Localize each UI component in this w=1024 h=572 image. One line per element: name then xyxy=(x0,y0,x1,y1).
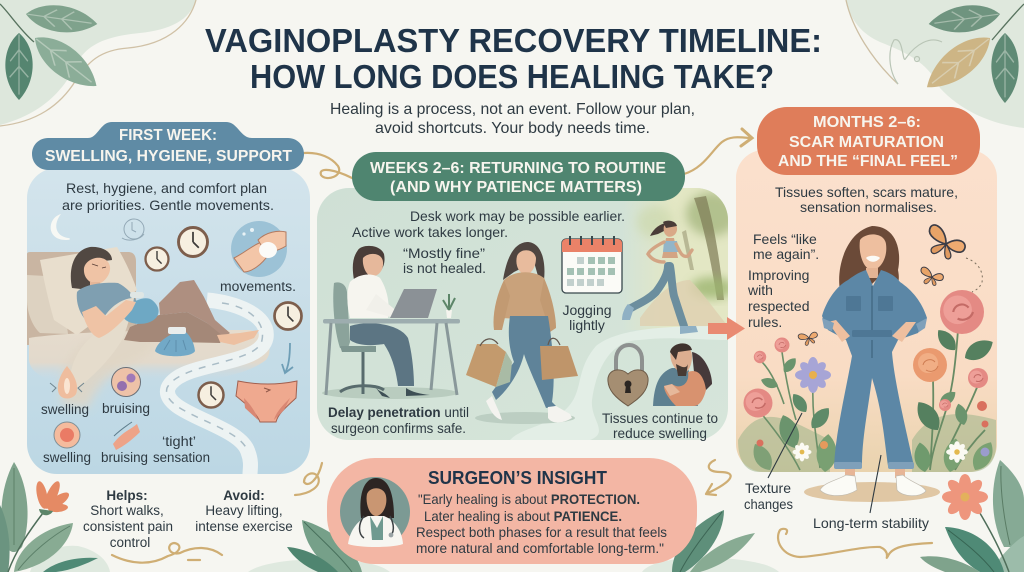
labels: swelling and bruising row one xyxy=(41,401,150,417)
illustration: forest backdrop xyxy=(632,188,728,330)
callout: improving: with xyxy=(747,282,773,298)
illustration: woman at desk xyxy=(322,246,460,399)
decoration: bottom-centre-right foliage xyxy=(642,510,779,572)
callout: feels like me again: me again”. xyxy=(753,246,819,262)
intro text: months 2-6: Tissues soften, scars mature, xyxy=(775,184,958,200)
heading: months 2-6: AND THE “FINAL FEEL” xyxy=(778,153,958,170)
illustration: couple xyxy=(653,343,712,406)
quote: surgeon's insight: Later healing is about PATIENCE. xyxy=(424,508,622,524)
labels: swelling, bruising and tight sensation: sensation xyxy=(153,450,210,465)
heading: weeks 2-6 xyxy=(352,152,685,201)
intro text: first week: Rest, hygiene, and comfort plan xyxy=(66,180,267,196)
panel background: surgeon's insight xyxy=(327,458,697,564)
icon: heart padlock xyxy=(608,345,648,406)
callout: improving: respected xyxy=(748,298,809,314)
decoration: bottom-right foliage xyxy=(920,460,1024,572)
decoration: bottom-centre-left foliage xyxy=(248,520,390,572)
label: texture changes xyxy=(744,480,793,512)
caption: delay penetration: surgeon confirms safe. xyxy=(331,420,466,436)
heading: first week xyxy=(32,122,304,170)
leader: long-term stability xyxy=(870,455,881,513)
icon: ice pack xyxy=(155,327,195,356)
icon: inflamed skin xyxy=(54,422,80,448)
icon: crescent moon xyxy=(51,214,70,240)
quote: surgeon's insight: more natural and comfortable long-term." xyxy=(416,540,664,556)
caption: delay penetration xyxy=(328,404,469,436)
panel background: first week xyxy=(27,168,310,474)
intro text: weeks 2-6 xyxy=(352,208,625,240)
illustration: meadow left xyxy=(738,338,838,474)
caption: tissues xyxy=(602,410,718,441)
heading: weeks 2-6: (AND WHY PATIENCE MATTERS) xyxy=(390,179,642,196)
icon: swelling xyxy=(50,366,84,398)
title xyxy=(205,22,822,95)
callout: feels like me again: Feels “like xyxy=(753,231,817,247)
illustration: walking woman with bags xyxy=(466,242,578,424)
intro text: first week xyxy=(62,180,274,213)
intro text: weeks 2-6: Active work takes longer. xyxy=(352,224,508,240)
title: VAGINOPLASTY RECOVERY TIMELINE: xyxy=(205,22,822,59)
illustration: jogger xyxy=(622,221,698,334)
text block: avoid xyxy=(195,488,293,534)
leader: texture changes xyxy=(768,413,802,478)
label: jogging lightly: lightly xyxy=(569,317,605,333)
icon: bruising xyxy=(112,368,140,396)
intro text: months 2-6: sensation normalises. xyxy=(800,199,937,215)
callout: improving: Improving xyxy=(748,267,809,283)
label: jogging lightly: Jogging xyxy=(562,302,612,318)
subtitle xyxy=(330,101,695,137)
panel: weeks 2-6 xyxy=(317,152,738,441)
text block: avoid: Avoid: xyxy=(223,488,265,503)
heading: surgeon's insight: SURGEON’S INSIGHT xyxy=(428,467,608,488)
intro text: first week: are priorities. Gentle movements. xyxy=(62,197,274,213)
caption: tissues: reduce swelling xyxy=(613,425,707,441)
connector squiggles and arrows xyxy=(112,129,932,563)
icons: butterflies xyxy=(798,223,982,347)
callout: feels like me again xyxy=(753,231,819,262)
illustration: resting woman xyxy=(70,247,259,392)
icon: arrow down xyxy=(282,343,293,373)
panel background: months 2-6 xyxy=(736,150,997,472)
label: jogging lightly xyxy=(562,302,612,333)
heading: months 2-6: MONTHS 2–6: xyxy=(813,114,921,131)
labels: swelling, bruising and tight sensation: ‘tight’ xyxy=(162,434,196,449)
quote: surgeon's insight xyxy=(416,491,667,556)
text block: helps: Short walks, xyxy=(90,503,164,518)
icon: hand washing xyxy=(231,221,287,277)
icon: clocks xyxy=(146,228,302,408)
text block: helps: Helps: xyxy=(106,488,148,503)
panel: surgeon's insight xyxy=(327,458,697,564)
label: long-term stability: Long-term stability xyxy=(813,515,929,531)
text block: helps: control xyxy=(110,535,150,550)
labels: swelling, bruising and tight sensation: swelling xyxy=(43,450,91,465)
text block: helps: consistent pain xyxy=(83,519,173,534)
caption: tissues: Tissues continue to xyxy=(602,410,718,426)
icon: sketched clock xyxy=(122,219,144,240)
intro text: weeks 2-6: Desk work may be possible earlier. xyxy=(410,208,625,224)
decoration: top-right foliage xyxy=(846,0,1024,128)
caption: delay penetration: Delay penetration until xyxy=(328,404,469,420)
illustration: smiling woman in denim jumpsuit xyxy=(804,226,940,502)
label: texture changes: changes xyxy=(744,496,793,512)
label: texture changes: Texture xyxy=(745,480,791,496)
icon: calendar xyxy=(562,236,622,293)
panel: months 2-6 xyxy=(736,107,998,513)
callout: mostly fine: is not healed. xyxy=(403,260,486,276)
callout: improving: rules. xyxy=(748,314,782,330)
subtitle: avoid shortcuts. Your body needs time. xyxy=(375,120,650,137)
labels: swelling, bruising and tight sensation xyxy=(43,434,210,465)
panel: first week xyxy=(27,122,310,474)
heading: months 2-6: SCAR MATURATION xyxy=(789,134,944,151)
intro text: months 2-6 xyxy=(775,184,958,215)
text block: helps xyxy=(83,488,173,550)
arrow: to months 2-6 xyxy=(708,317,745,340)
callout: improving xyxy=(747,267,809,330)
title: HOW LONG DOES HEALING TAKE? xyxy=(250,58,774,95)
quote: surgeon's insight: Respect both phases for a result that feels xyxy=(416,524,667,540)
illustration: bed xyxy=(27,247,269,408)
label: movements: movements. xyxy=(220,279,296,294)
callout: mostly fine xyxy=(403,245,486,276)
icon: underwear xyxy=(236,381,297,422)
callout: mostly fine: “Mostly fine” xyxy=(403,245,485,261)
subtitle: Healing is a process, not an event. Follow your plan, xyxy=(330,101,695,118)
illustration: light winding path xyxy=(510,326,728,440)
heading: months 2-6 xyxy=(757,107,980,175)
heading: first week: SWELLING, HYGIENE, SUPPORT xyxy=(45,148,293,165)
panel background: weeks 2-6 xyxy=(317,188,728,440)
portrait: surgeon xyxy=(340,477,410,547)
labels: swelling, bruising and tight sensation: bruising xyxy=(101,450,148,465)
text block: avoid: intense exercise xyxy=(195,519,293,534)
decoration: top-left foliage xyxy=(0,0,196,126)
text block: avoid: Heavy lifting, xyxy=(205,503,283,518)
decoration: bottom-left foliage xyxy=(0,462,110,572)
quote: surgeon's insight: "Early healing is about PROTECTION. xyxy=(418,491,640,507)
labels: swelling and bruising row one: bruising xyxy=(102,401,150,416)
heading: weeks 2-6: WEEKS 2–6: RETURNING TO ROUTINE xyxy=(370,160,666,177)
labels: swelling and bruising row one: swelling xyxy=(41,402,89,417)
illustration: winding path xyxy=(167,300,266,474)
icon: tight skin xyxy=(113,422,140,450)
heading: first week: FIRST WEEK: xyxy=(119,127,217,144)
illustration: meadow right xyxy=(911,290,998,474)
